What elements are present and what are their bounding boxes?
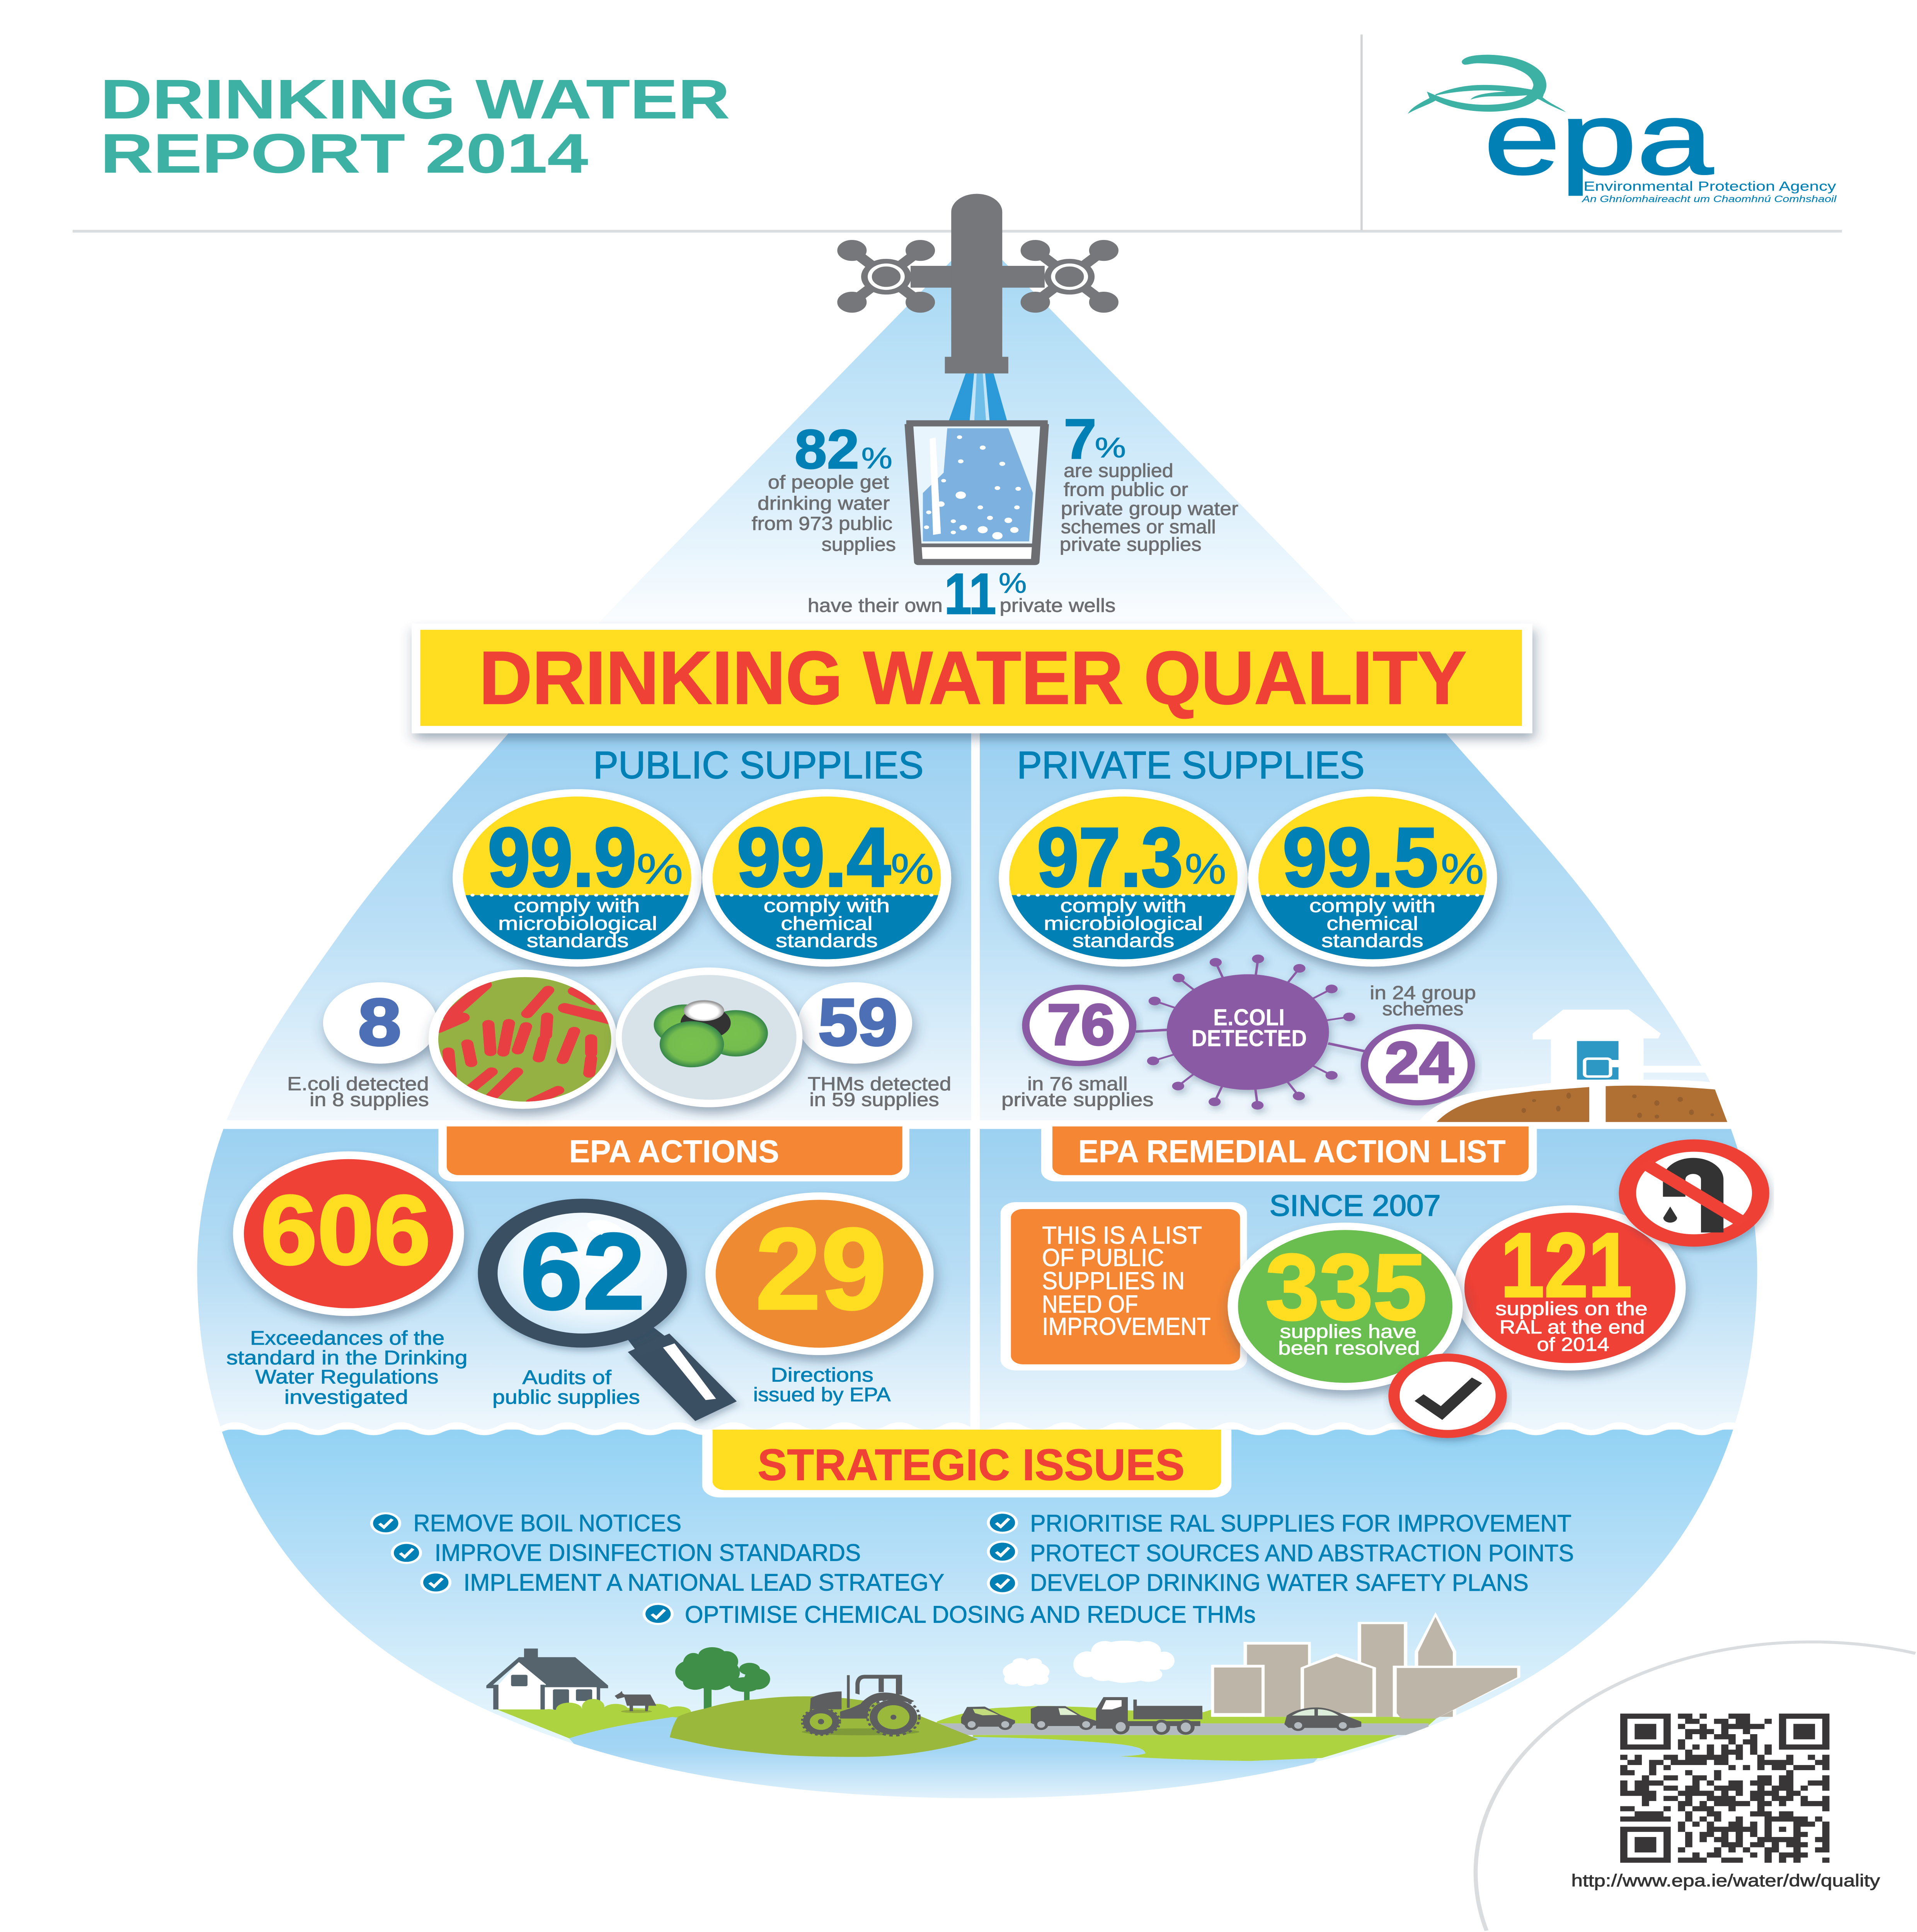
stat: 24 group schemes: 24	[1385, 1030, 1454, 1095]
badge: 99.4 percent chemical public: %	[891, 845, 934, 893]
banner: drinking water quality	[412, 624, 1532, 733]
buildings	[1211, 1612, 1520, 1719]
stat: 59 THMs: 59	[818, 985, 897, 1060]
badge: 99.5 percent chemical private: comply with	[1309, 895, 1435, 916]
icon: glass of water	[906, 423, 1048, 563]
icon: EPA swirl	[1408, 55, 1566, 114]
stat: 76 small private supplies: 76	[1047, 992, 1115, 1057]
icon: car 2	[1284, 1708, 1361, 1730]
stat: 82 percent public supplies: drinking water	[758, 492, 890, 514]
item: develop safety plans: DEVELOP DRINKING WATER SAFETY PLANS	[1030, 1569, 1529, 1596]
badge: 29 directions: 29	[755, 1204, 887, 1333]
tab: EPA remedial action list: EPA REMEDIAL ACTION LIST	[1078, 1134, 1506, 1169]
icon: van	[1031, 1706, 1097, 1729]
stat: 82 percent public supplies: %	[861, 442, 892, 474]
caption: directions issued by EPA: issued by EPA	[753, 1384, 891, 1406]
caption: exceedances: Exceedances of the	[250, 1327, 444, 1349]
caption: in 76 small private supplies	[1001, 1073, 1154, 1110]
stat: 7 percent group schemes: private supplies	[1060, 534, 1202, 555]
badge: 99.4 percent chemical public: comply with	[764, 895, 890, 916]
caption: exceedances: Water Regulations	[255, 1366, 438, 1388]
callout: description of remedial action list: IMPROVEMENT	[1042, 1313, 1210, 1340]
stat: 8 E.coli	[323, 982, 437, 1064]
badge: 335 supplies resolved: 335	[1265, 1235, 1427, 1339]
badge: 29 directions	[705, 1192, 934, 1355]
badge: 99.4 percent chemical public: 99.4	[737, 810, 891, 904]
lower meadow	[973, 1735, 1398, 1761]
badge: 97.3 percent microbiological private	[999, 789, 1248, 969]
item: protect sources: PROTECT SOURCES AND ABSTRACTION POINTS	[1030, 1540, 1574, 1567]
badge: 97.3 percent microbiological private: 97.3	[1037, 810, 1183, 904]
icon: THM molecule circle	[616, 968, 802, 1107]
stat: 59 THMs	[798, 982, 912, 1064]
heading: since 2007: SINCE 2007	[1270, 1189, 1441, 1222]
caption: E.coli detected in 8 supplies	[287, 1073, 429, 1110]
item: improve disinfection standards	[391, 1539, 861, 1566]
item: prioritise RAL supplies	[987, 1510, 1571, 1537]
badge: 99.5 percent chemical private: %	[1441, 845, 1484, 893]
QR code	[1620, 1714, 1830, 1863]
tab: EPA actions: EPA ACTIONS	[569, 1134, 779, 1169]
water stream	[947, 373, 1008, 425]
item: remove boil notices: REMOVE BOIL NOTICES	[414, 1510, 681, 1537]
badge: 99.4 percent chemical public: chemical	[781, 912, 873, 934]
stat: 7 percent group schemes: from public or	[1064, 478, 1188, 500]
badge: 121 supplies on the RAL	[1454, 1205, 1686, 1371]
item: develop safety plans	[987, 1569, 1529, 1596]
caption: exceedances	[226, 1327, 468, 1408]
item: protect sources	[987, 1540, 1574, 1567]
stat: 11 percent private wells: private wells	[1000, 594, 1115, 616]
tab: EPA remedial action list	[1041, 1126, 1537, 1182]
stat: 76 small private supplies	[1026, 987, 1133, 1063]
caption: directions issued by EPA: Directions	[771, 1364, 873, 1386]
title: DRINKING WATER	[100, 68, 730, 130]
left meadow	[496, 1708, 695, 1738]
stat: 82 percent public supplies: supplies	[822, 534, 896, 555]
caption: E.coli detected in 8 supplies: E.coli detected	[287, 1073, 429, 1094]
badge: 335 supplies resolved: been resolved	[1278, 1337, 1420, 1359]
icon: tractor	[802, 1675, 919, 1736]
wave divider	[173, 1422, 1781, 1437]
caption: in 24 group schemes: in 24 group	[1370, 982, 1476, 1003]
badge: 121 supplies on the RAL: supplies on the	[1495, 1298, 1648, 1319]
header divider lines	[73, 34, 1842, 233]
icon: large tree	[675, 1647, 740, 1711]
icon: cow	[615, 1691, 656, 1713]
badge: 99.9 percent microbiological public: standards	[527, 930, 629, 951]
caption: in 24 group schemes	[1370, 982, 1476, 1019]
stat: 82 percent public supplies: 82	[795, 418, 859, 480]
caption: in 76 small private supplies: private supplies	[1001, 1089, 1154, 1110]
panel: private supplies background	[980, 733, 1776, 1120]
panel: remedial action list background	[980, 1129, 1776, 1430]
callout: description of remedial action list: SUPPLIES IN	[1042, 1267, 1185, 1294]
caption: in 76 small private supplies: in 76 small	[1027, 1073, 1128, 1094]
caption: THMs detected in 59 supplies: in 59 supplies	[809, 1089, 939, 1110]
badge: 606 exceedances: 606	[260, 1175, 431, 1285]
badge: 97.3 percent microbiological private: comply with	[1060, 895, 1187, 916]
icon: bacteria circle	[429, 969, 617, 1109]
caption: in 24 group schemes: schemes	[1382, 998, 1464, 1019]
icon: tick sign	[1394, 1357, 1501, 1434]
stat: 11 percent private wells	[808, 561, 1115, 626]
badge: 97.3 percent microbiological private: standards	[1072, 930, 1174, 951]
item: implement a national lead strategy	[420, 1569, 944, 1596]
stat: 7 percent group schemes: are supplied	[1064, 459, 1173, 481]
landscape scene	[486, 1612, 1520, 1798]
icon: house	[486, 1648, 608, 1710]
badge: 99.5 percent chemical private: standards	[1321, 930, 1423, 951]
caption: THMs detected in 59 supplies	[808, 1073, 951, 1110]
icon: truck	[1096, 1697, 1202, 1733]
panel: strategic issues background	[173, 1430, 1781, 1799]
tab: strategic issues: STRATEGIC ISSUES	[758, 1440, 1185, 1490]
icon: E.coli virus	[1136, 954, 1365, 1110]
badge: 97.3 percent microbiological private: %	[1185, 845, 1226, 893]
badge: 99.5 percent chemical private: chemical	[1326, 912, 1418, 934]
item: implement a national lead strategy: IMPLEMENT A NATIONAL LEAD STRATEGY	[463, 1569, 944, 1596]
callout: description of remedial action list: NEED OF	[1042, 1291, 1138, 1318]
badge: 99.9 percent microbiological public	[453, 789, 701, 969]
panel: EPA actions background	[173, 1129, 970, 1430]
badge: 335 supplies resolved	[1227, 1223, 1463, 1390]
badge: 97.3 percent microbiological private: microbiological	[1044, 912, 1203, 934]
icon: tap	[843, 194, 1112, 373]
item: optimise chemical dosing	[642, 1601, 1256, 1628]
stat: 82 percent public supplies: of people get	[768, 471, 889, 493]
caption: audits of public supplies: public supplies	[492, 1386, 640, 1408]
icon: private well	[1419, 1010, 1733, 1123]
island	[670, 1696, 978, 1757]
right handle	[1027, 244, 1112, 308]
banner: drinking water quality: DRINKING WATER QUALITY	[479, 636, 1467, 720]
item: remove boil notices	[370, 1510, 681, 1537]
road hill	[934, 1706, 1436, 1725]
badge: 335 supplies resolved: supplies have	[1280, 1320, 1416, 1342]
stat: 7 percent group schemes	[1060, 407, 1238, 555]
left handle	[843, 244, 929, 308]
caption: exceedances: standard in the Drinking	[226, 1347, 468, 1369]
caption: THMs detected in 59 supplies: THMs detected	[808, 1073, 951, 1094]
icon: car 1	[961, 1707, 1015, 1729]
clouds	[1003, 1641, 1175, 1686]
callout: description of remedial action list	[1001, 1202, 1247, 1371]
epa wordmark: epa	[1484, 82, 1714, 196]
stat: 82 percent public supplies: from 973 public	[752, 512, 892, 534]
stat: 7 percent group schemes: schemes or small	[1061, 516, 1216, 537]
icon: E.coli virus: DETECTED	[1192, 1025, 1307, 1051]
stat: 8 E.coli: 8	[358, 985, 401, 1060]
callout: description of remedial action list: THIS IS A LIST	[1042, 1222, 1202, 1249]
stat: 11 percent private wells: have their own	[808, 594, 943, 616]
stat: 11 percent private wells: %	[999, 567, 1027, 599]
badge: 121 supplies on the RAL: RAL at the end	[1500, 1316, 1645, 1338]
badge: 99.9 percent microbiological public: %	[637, 845, 683, 893]
badge: 606 exceedances	[233, 1151, 464, 1316]
tab: strategic issues	[702, 1430, 1231, 1497]
badge: 99.5 percent chemical private: 99.5	[1283, 810, 1438, 904]
item: improve disinfection standards: IMPROVE DISINFECTION STANDARDS	[435, 1539, 861, 1566]
stat: 7 percent group schemes: 7	[1064, 407, 1096, 471]
caption: audits of public supplies: Audits of	[522, 1367, 612, 1388]
agency name in Irish: An Ghníomhaireacht um Chaomhnú Comhshaoil	[1582, 194, 1837, 204]
badge: 99.9 percent microbiological public: comply with	[514, 895, 640, 916]
icon: magnifying glass with 62 audits: 62	[520, 1211, 645, 1332]
caption: directions issued by EPA	[753, 1364, 891, 1406]
badge: 99.9 percent microbiological public: microbiological	[498, 912, 657, 934]
corner arc behind QR code	[1476, 1642, 1915, 1930]
badge: 99.9 percent microbiological public: 99.9	[488, 810, 637, 904]
badge: 99.4 percent chemical public: standards	[776, 930, 878, 951]
icon: magnifying glass with 62 audits	[478, 1199, 737, 1421]
panel: public supplies background	[173, 733, 971, 1120]
item: prioritise RAL supplies: PRIORITISE RAL SUPPLIES FOR IMPROVEMENT	[1030, 1510, 1571, 1537]
cone of light from the tap	[614, 260, 1341, 607]
callout: description of remedial action list: OF PUBLIC	[1042, 1244, 1164, 1272]
stat: 11 percent private wells: 11	[944, 561, 996, 626]
stat: 82 percent public supplies	[752, 418, 896, 555]
heading: public supplies: PUBLIC SUPPLIES	[593, 744, 924, 787]
caption: audits of public supplies	[492, 1367, 640, 1408]
caption: E.coli detected in 8 supplies: in 8 supplies	[310, 1089, 429, 1110]
EPA logo	[1408, 55, 1837, 204]
icon: small tree	[730, 1663, 770, 1702]
agency name: Environmental Protection Agency	[1583, 179, 1836, 194]
badge: 121 supplies on the RAL: of 2014	[1537, 1333, 1609, 1355]
stat: 7 percent group schemes: %	[1095, 432, 1126, 463]
road	[917, 1723, 1428, 1735]
list: strategic issues	[370, 1510, 1574, 1628]
bushes	[556, 1699, 691, 1718]
title	[100, 68, 730, 185]
title: REPORT 2014	[100, 123, 588, 185]
stat: 24 group schemes	[1364, 1027, 1471, 1103]
item: optimise chemical dosing: OPTIMISE CHEMICAL DOSING AND REDUCE THMs	[685, 1601, 1256, 1628]
heading: private supplies: PRIVATE SUPPLIES	[1017, 744, 1365, 787]
icon: no tap sign	[1628, 1146, 1760, 1240]
badge: 99.4 percent chemical public	[702, 789, 951, 969]
caption: exceedances: investigated	[284, 1386, 408, 1408]
bubbles	[924, 435, 1021, 539]
badge: 121 supplies on the RAL: 121	[1500, 1214, 1632, 1316]
stat: 7 percent group schemes: private group water	[1061, 498, 1238, 519]
river	[569, 1713, 1318, 1798]
badge: 99.5 percent chemical private	[1248, 789, 1497, 969]
tab: EPA actions	[438, 1126, 909, 1182]
icon: E.coli virus: E.COLI	[1213, 1004, 1285, 1031]
